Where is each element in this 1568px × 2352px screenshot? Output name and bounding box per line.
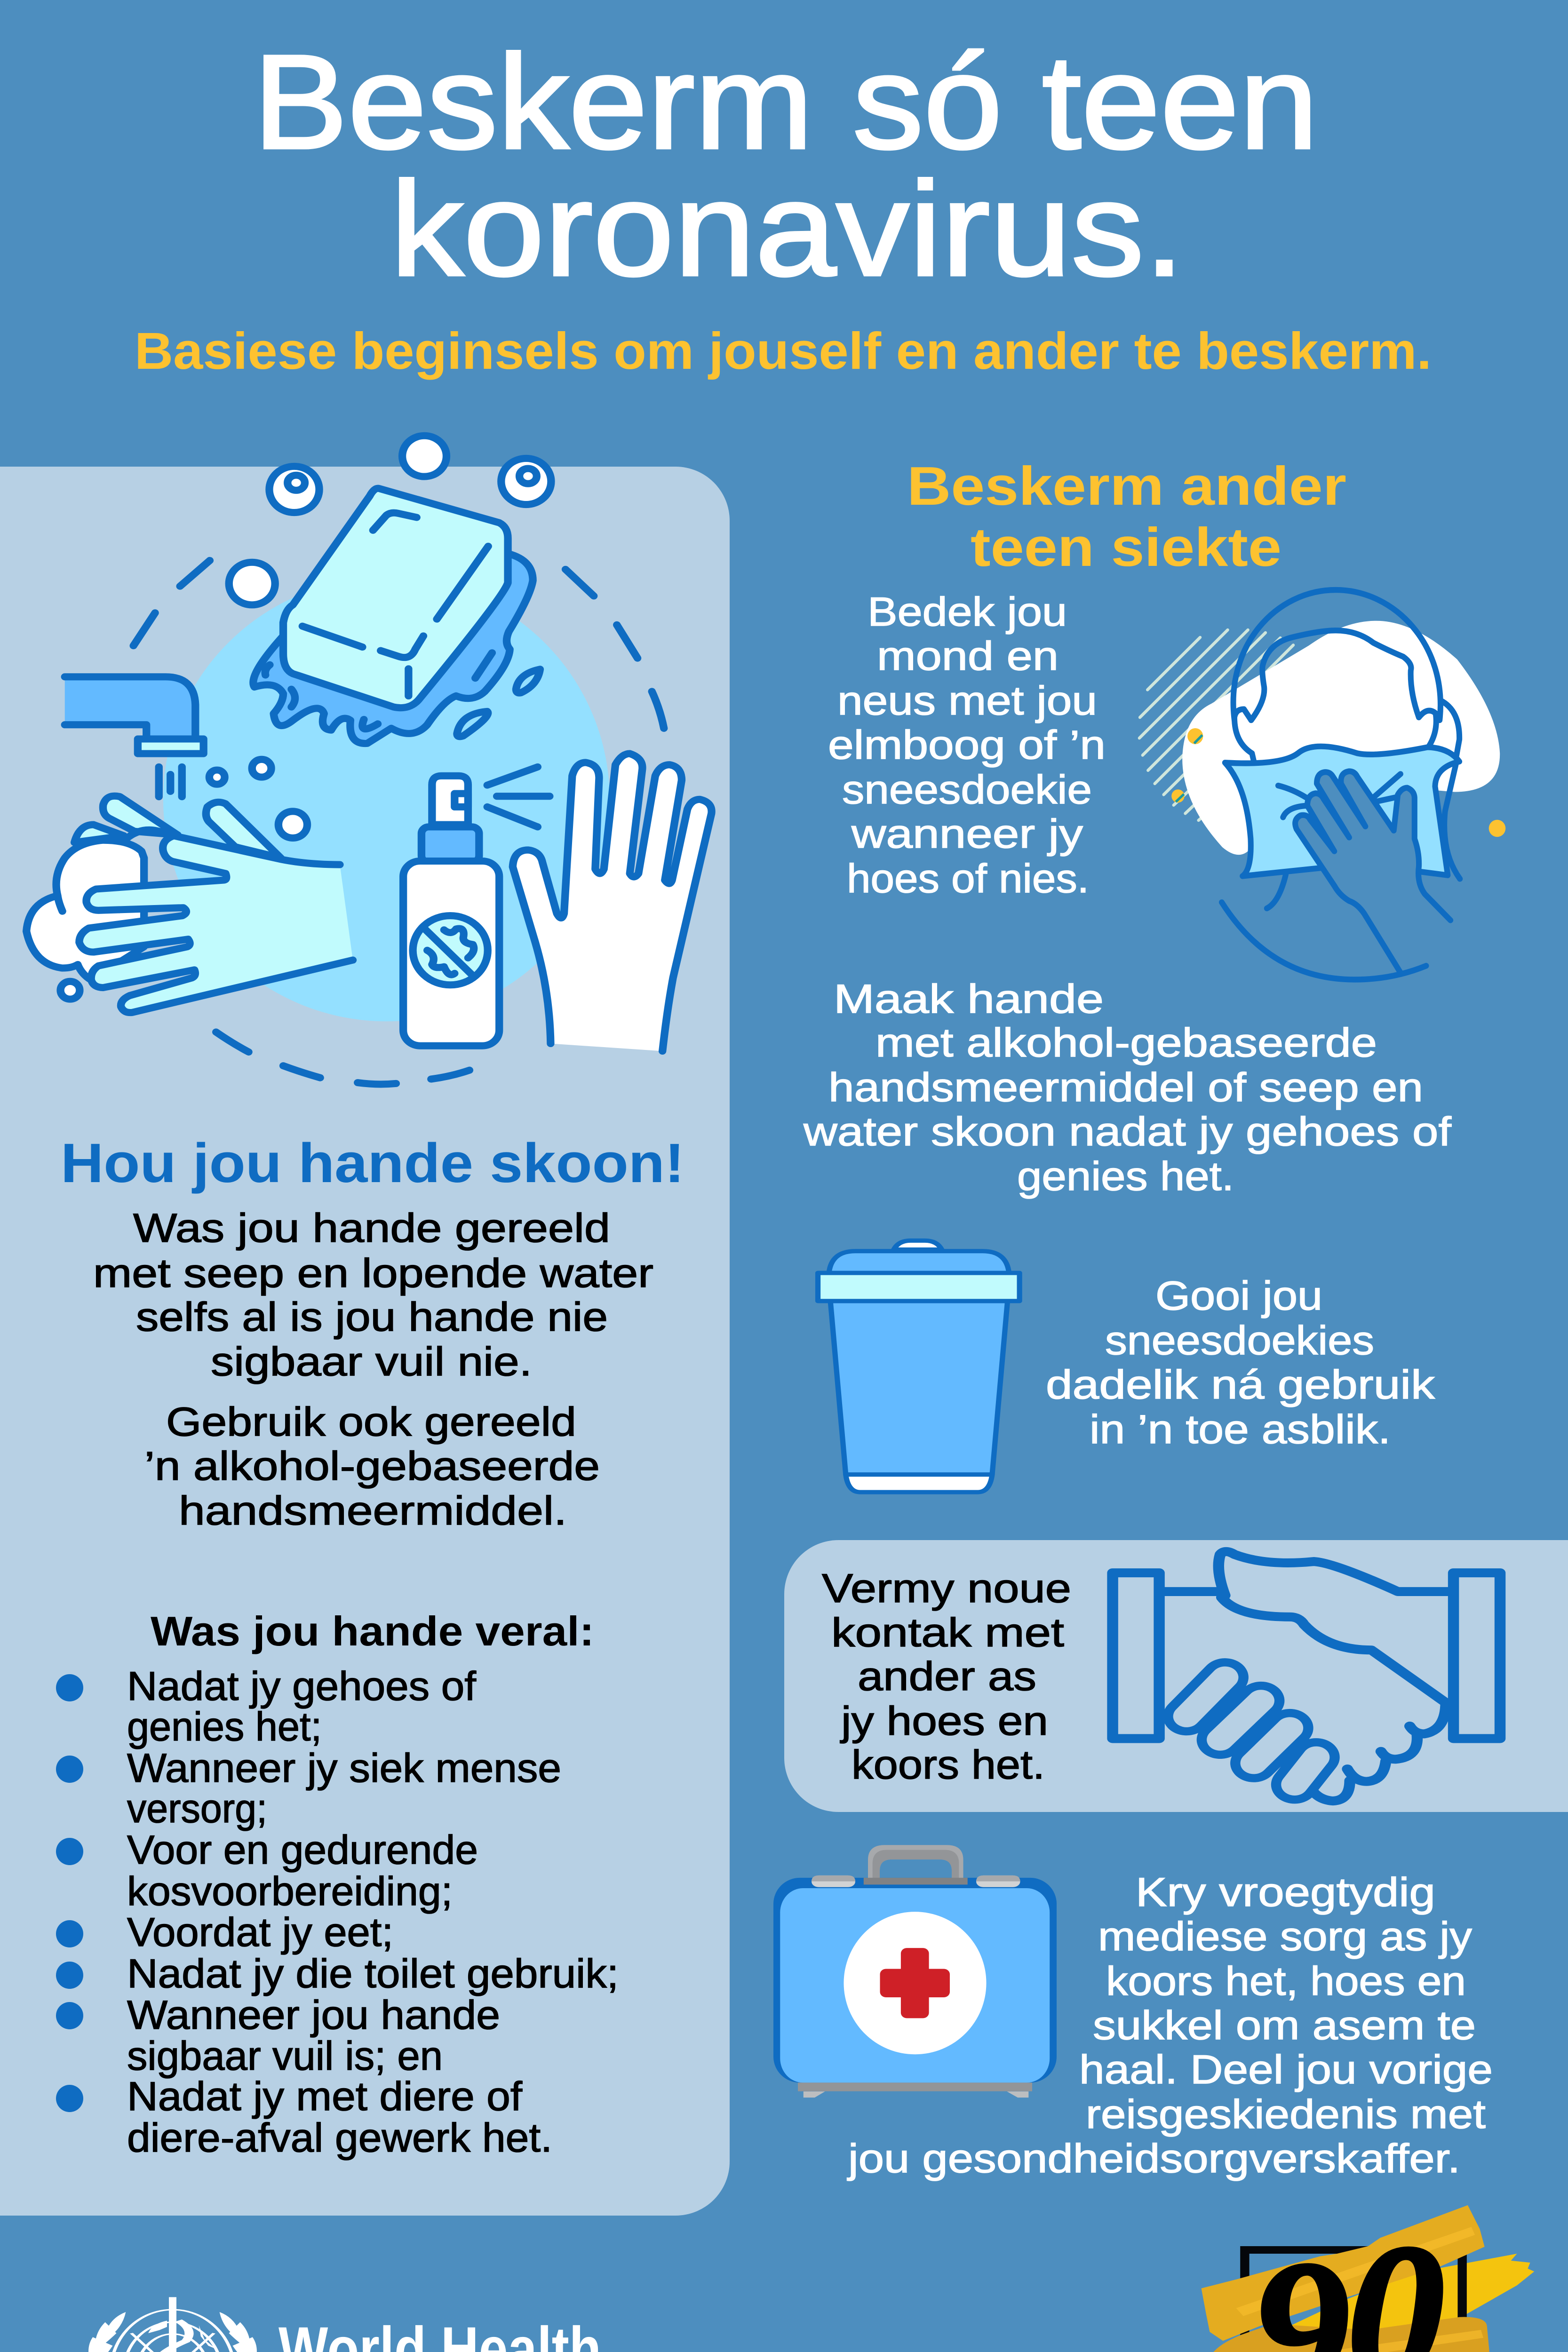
text block: avoid close contact <box>822 1566 1071 1788</box>
text block: clean hands after coughing: genies het. <box>1017 1154 1234 1199</box>
text block: throw away tissues: sneesdoekies <box>1105 1318 1374 1363</box>
text block: avoid close contact: kontak met <box>831 1610 1064 1655</box>
text block: seek medical care: mediese sorg as jy <box>1098 1914 1472 1959</box>
heading: protect others: Beskerm ander <box>907 455 1346 516</box>
icon: closed bin <box>818 1240 1019 1492</box>
illustration: person sneezing into tissue <box>1139 590 1505 979</box>
icon: first aid kit <box>773 1845 1057 2098</box>
text block: seek medical care: reisgeskiedenis met <box>1086 2092 1486 2137</box>
icon: soap bar <box>253 488 540 744</box>
text block: throw away tissues: in ’n toe asblik. <box>1090 1407 1391 1452</box>
icon: glove <box>513 754 712 1051</box>
text block: avoid close contact: jy hoes en <box>840 1699 1048 1744</box>
heading: protect others <box>907 455 1346 578</box>
icon: soapy hand <box>26 796 353 1013</box>
subheading: wash especially: Was jou hande veral: <box>151 1608 594 1654</box>
text block: hand washing advice: handsmeermiddel. <box>179 1488 567 1534</box>
text block: seek medical care <box>847 1870 1493 2181</box>
logo: ATKV 90 years <box>1202 2203 1534 2352</box>
text block: seek medical care: jou gesondheidsorgverskaffer. <box>847 2136 1460 2181</box>
white blob <box>1182 621 1500 855</box>
bullet list: versorg; <box>127 1786 267 1831</box>
frame and brush strokes <box>1202 2205 1534 2352</box>
text block: cover mouth and nose: neus met jou <box>837 678 1097 723</box>
text block: cover mouth and nose: elmboog of ’n <box>828 723 1106 768</box>
bullet list <box>56 1664 619 2161</box>
dashed ring <box>134 560 664 1084</box>
icon: bubbles <box>61 436 551 999</box>
title: Beskerm só teen <box>253 27 1318 177</box>
text block: hand washing advice: Gebruik ook gereeld <box>166 1399 576 1445</box>
heading: keep hands clean: Hou jou hande skoon! <box>61 1132 685 1194</box>
text block: seek medical care: koors het, hoes en <box>1106 1959 1466 2004</box>
text block: throw away tissues: Gooi jou <box>1155 1273 1322 1319</box>
subtitle: Basiese beginsels om jouself en ander te beskerm. <box>135 322 1432 380</box>
head outline <box>1222 590 1460 979</box>
bullet list: Wanneer jou hande <box>127 1993 500 2038</box>
tissue <box>1225 747 1459 876</box>
bullet list: Voordat jy eet; <box>127 1910 393 1955</box>
text block: clean hands after coughing: met alkohol-gebaseerde <box>876 1020 1377 1065</box>
bullet list: Nadat jy gehoes of <box>127 1664 477 1709</box>
text block: avoid close contact: koors het. <box>852 1742 1045 1788</box>
text block: throw away tissues: dadelik ná gebruik <box>1046 1362 1435 1407</box>
text block: hand washing advice: sigbaar vuil nie. <box>211 1339 532 1384</box>
bullet list: Voor en gedurende <box>127 1828 478 1873</box>
icon: sanitiser bottle <box>403 767 549 1046</box>
bullet list: kosvoorbereiding; <box>127 1869 453 1914</box>
text block: avoid close contact: ander as <box>858 1654 1036 1699</box>
bullet list: genies het; <box>127 1704 322 1749</box>
icon: WHO emblem <box>83 2297 263 2352</box>
text block: clean hands after coughing <box>803 977 1452 1199</box>
hand <box>1278 771 1450 973</box>
bullet list: diere-afval gewerk het. <box>127 2115 552 2161</box>
illustration: soap, tap, hands, sanitiser, glove <box>26 436 712 1084</box>
text block: hand washing advice: Was jou hande gereeld <box>133 1206 610 1251</box>
text block: cover mouth and nose <box>828 589 1106 901</box>
text block: cover mouth and nose: hoes of nies. <box>847 856 1089 901</box>
text block: cover mouth and nose: Bedek jou <box>868 589 1067 635</box>
text block: hand washing advice <box>93 1206 653 1534</box>
bullet list: Nadat jy met diere of <box>127 2074 523 2119</box>
icon: tap <box>65 677 204 797</box>
icon: handshake <box>1113 1551 1500 1801</box>
text block: seek medical care: sukkel om asem te <box>1093 2003 1476 2048</box>
text block: clean hands after coughing: Maak hande <box>834 977 1104 1022</box>
hatch lines <box>1139 630 1293 820</box>
text block: seek medical care: Kry vroegtydig <box>1136 1870 1435 1915</box>
panel: avoid close contact <box>784 1540 1568 1812</box>
text block: seek medical care: haal. Deel jou vorige <box>1079 2047 1493 2092</box>
heading: protect others: teen siekte <box>971 516 1281 578</box>
bullet list: Wanneer jy siek mense <box>127 1746 561 1791</box>
text block: cover mouth and nose: mond en <box>877 634 1059 679</box>
bullet list: sigbaar vuil is; en <box>127 2034 443 2079</box>
text block: clean hands after coughing: water skoon nadat jy gehoes of <box>803 1109 1452 1154</box>
logo: World Health Organization <box>83 2297 601 2352</box>
text block: cover mouth and nose: wanneer jy <box>851 811 1083 857</box>
panel: keep hands clean <box>0 467 730 2216</box>
text block: clean hands after coughing: handsmeermiddel of seep en <box>828 1065 1423 1110</box>
text block: hand washing advice: met seep en lopende water <box>93 1251 653 1296</box>
text block: cover mouth and nose: sneesdoekie <box>842 767 1092 812</box>
yellow dots <box>1171 728 1505 837</box>
text block: throw away tissues <box>1046 1273 1435 1452</box>
title: koronavirus. <box>390 154 1185 304</box>
light blue circle <box>163 577 610 1021</box>
icon: laurel leaves <box>83 2312 137 2352</box>
bullet list: Nadat jy die toilet gebruik; <box>127 1951 619 1996</box>
text block: hand washing advice: selfs al is jou hande nie <box>136 1295 608 1340</box>
text block: hand washing advice: ’n alkohol-gebaseerde <box>144 1444 600 1489</box>
title <box>253 27 1318 304</box>
text block: avoid close contact: Vermy noue <box>822 1566 1071 1611</box>
